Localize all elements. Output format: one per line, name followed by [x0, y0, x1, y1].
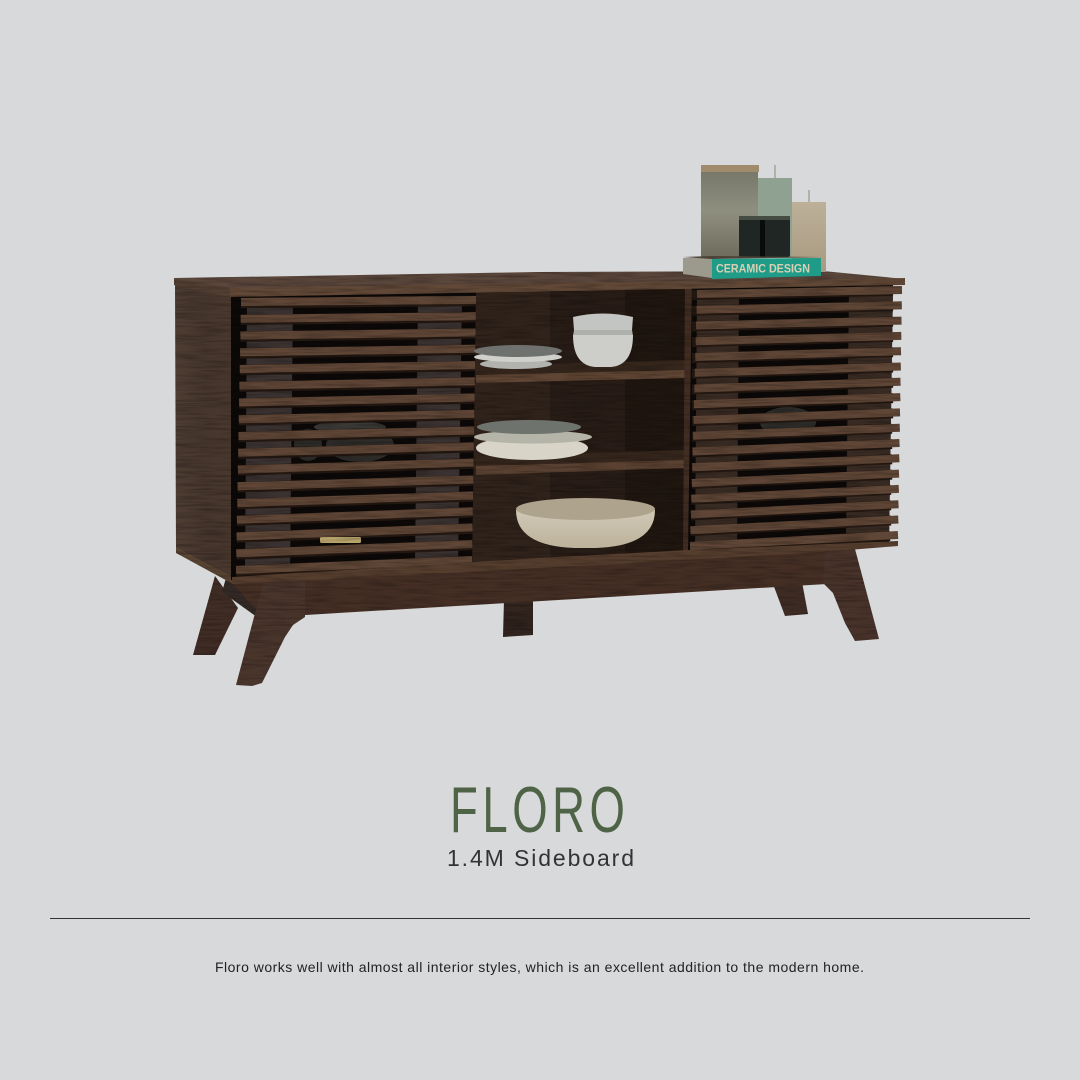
green candle [758, 165, 792, 258]
left door backing [231, 288, 476, 580]
book [683, 256, 822, 279]
dishes behind right door [760, 407, 816, 437]
beige candle [792, 190, 826, 272]
back right leg [773, 582, 808, 616]
title: FLORO [450, 773, 629, 846]
sideboard illustration [174, 271, 905, 686]
plates on upper shelf [474, 345, 562, 369]
stacked plates on middle shelf [474, 420, 592, 460]
central open interior [470, 284, 694, 570]
shelves [476, 360, 685, 475]
back left leg [193, 576, 238, 655]
left door handle [320, 537, 361, 543]
back middle leg [503, 598, 533, 637]
dishes behind left door [294, 421, 394, 462]
dark glass votive [739, 216, 790, 257]
subtitle: 1.4M Sideboard [447, 845, 634, 871]
central divider post [683, 285, 695, 552]
side apron [222, 578, 266, 617]
right door backing [688, 283, 893, 553]
plinth [232, 550, 827, 616]
divider [50, 918, 1030, 920]
front left leg [236, 581, 305, 686]
right door slat shadows [690, 291, 893, 547]
decor on top [683, 165, 826, 279]
left door slats [236, 300, 476, 570]
description: Floro works well with almost all interior styles, which is an excellent addition to the modern home. [215, 959, 864, 975]
book: CERAMIC DESIGN [716, 264, 810, 276]
right door slats [690, 290, 902, 546]
jar [701, 165, 759, 258]
right door frame blocks [695, 294, 739, 548]
large bowl on lower shelf [516, 498, 655, 548]
top board [174, 271, 905, 297]
left door frame blocks [245, 300, 293, 574]
side panel [175, 284, 234, 584]
stacked bowls on upper shelf [573, 314, 633, 367]
front right leg [823, 549, 879, 641]
left door slat shadows [236, 301, 476, 571]
plinth rail [232, 541, 898, 584]
